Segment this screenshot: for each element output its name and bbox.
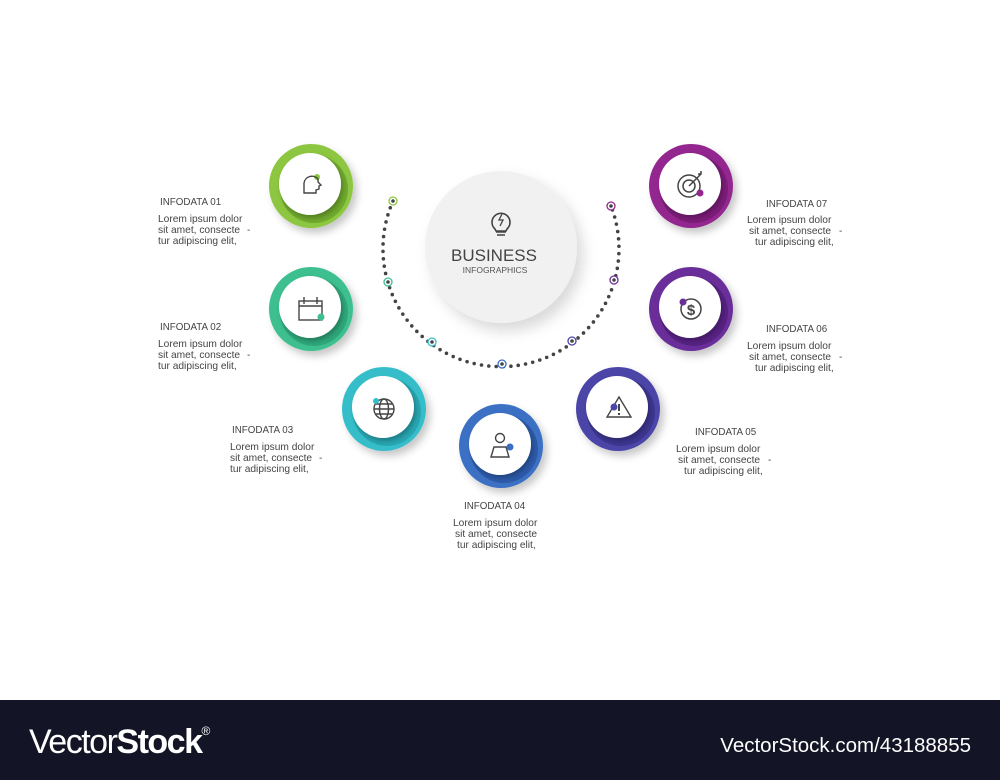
step 04 <box>459 404 543 488</box>
text 07 <box>747 199 842 248</box>
text 05: INFODATA 05 <box>695 427 757 438</box>
footer logo: VectorStock <box>29 723 201 761</box>
text 04: tur adipiscing elit, <box>457 540 536 551</box>
text 01: - <box>247 225 250 236</box>
text 02: Lorem ipsum dolor <box>158 339 243 350</box>
text 03: sit amet, consecte <box>230 453 312 464</box>
text 02 <box>158 322 250 372</box>
icon: target <box>678 171 704 197</box>
text 06: Lorem ipsum dolor <box>747 341 832 352</box>
icon: calendar <box>299 297 324 320</box>
text 02: - <box>247 350 250 361</box>
icon: head <box>304 174 321 193</box>
text 02: tur adipiscing elit, <box>158 361 237 372</box>
text 05: - <box>768 455 771 466</box>
center circle: business infographics: BUSINESS <box>451 246 537 265</box>
text 05: tur adipiscing elit, <box>684 466 763 477</box>
icon: globe <box>373 398 394 419</box>
text 01 <box>158 197 250 247</box>
text 01: Lorem ipsum dolor <box>158 214 243 225</box>
text 03: Lorem ipsum dolor <box>230 442 315 453</box>
text 05: sit amet, consecte <box>678 455 760 466</box>
step 05 <box>576 367 660 451</box>
text 04: Lorem ipsum dolor <box>453 518 538 529</box>
footer logo: ® <box>201 724 210 738</box>
step 06 <box>649 267 733 351</box>
icon: warning <box>607 397 631 417</box>
center circle: business infographics <box>425 171 577 323</box>
text 07: - <box>839 226 842 237</box>
text 06: sit amet, consecte <box>749 352 831 363</box>
icon: dollar coin: $ <box>687 302 696 319</box>
text 07: INFODATA 07 <box>766 199 827 210</box>
step 03 <box>342 367 426 451</box>
footer bar <box>0 700 1000 780</box>
text 04 <box>453 501 538 551</box>
text 01: tur adipiscing elit, <box>158 236 237 247</box>
text 06 <box>747 324 842 374</box>
text 03: tur adipiscing elit, <box>230 464 309 475</box>
icon: user on map <box>491 434 514 457</box>
text 03: - <box>319 453 322 464</box>
text 06: tur adipiscing elit, <box>755 363 834 374</box>
text 05: Lorem ipsum dolor <box>676 444 761 455</box>
text 01: sit amet, consecte <box>158 225 240 236</box>
icon: light bulb <box>492 213 510 235</box>
text 03 <box>230 425 322 475</box>
text 02: INFODATA 02 <box>160 322 221 333</box>
text 04: sit amet, consecte <box>455 529 537 540</box>
center circle: business infographics: INFOGRAPHICS <box>463 265 528 275</box>
text 01: INFODATA 01 <box>160 197 221 208</box>
step 02 <box>269 267 353 351</box>
text 07: Lorem ipsum dolor <box>747 215 832 226</box>
footer url: VectorStock.com/43188855 <box>720 734 971 757</box>
text 06: - <box>839 352 842 363</box>
text 03: INFODATA 03 <box>232 425 294 436</box>
step 01 <box>269 144 353 228</box>
dotted arc <box>383 197 619 368</box>
text 04: INFODATA 04 <box>464 501 526 512</box>
text 05 <box>676 427 771 477</box>
text 07: sit amet, consecte <box>749 226 831 237</box>
text 07: tur adipiscing elit, <box>755 237 834 248</box>
text 06: INFODATA 06 <box>766 324 828 335</box>
step 07 <box>649 144 733 228</box>
text 02: sit amet, consecte <box>158 350 240 361</box>
